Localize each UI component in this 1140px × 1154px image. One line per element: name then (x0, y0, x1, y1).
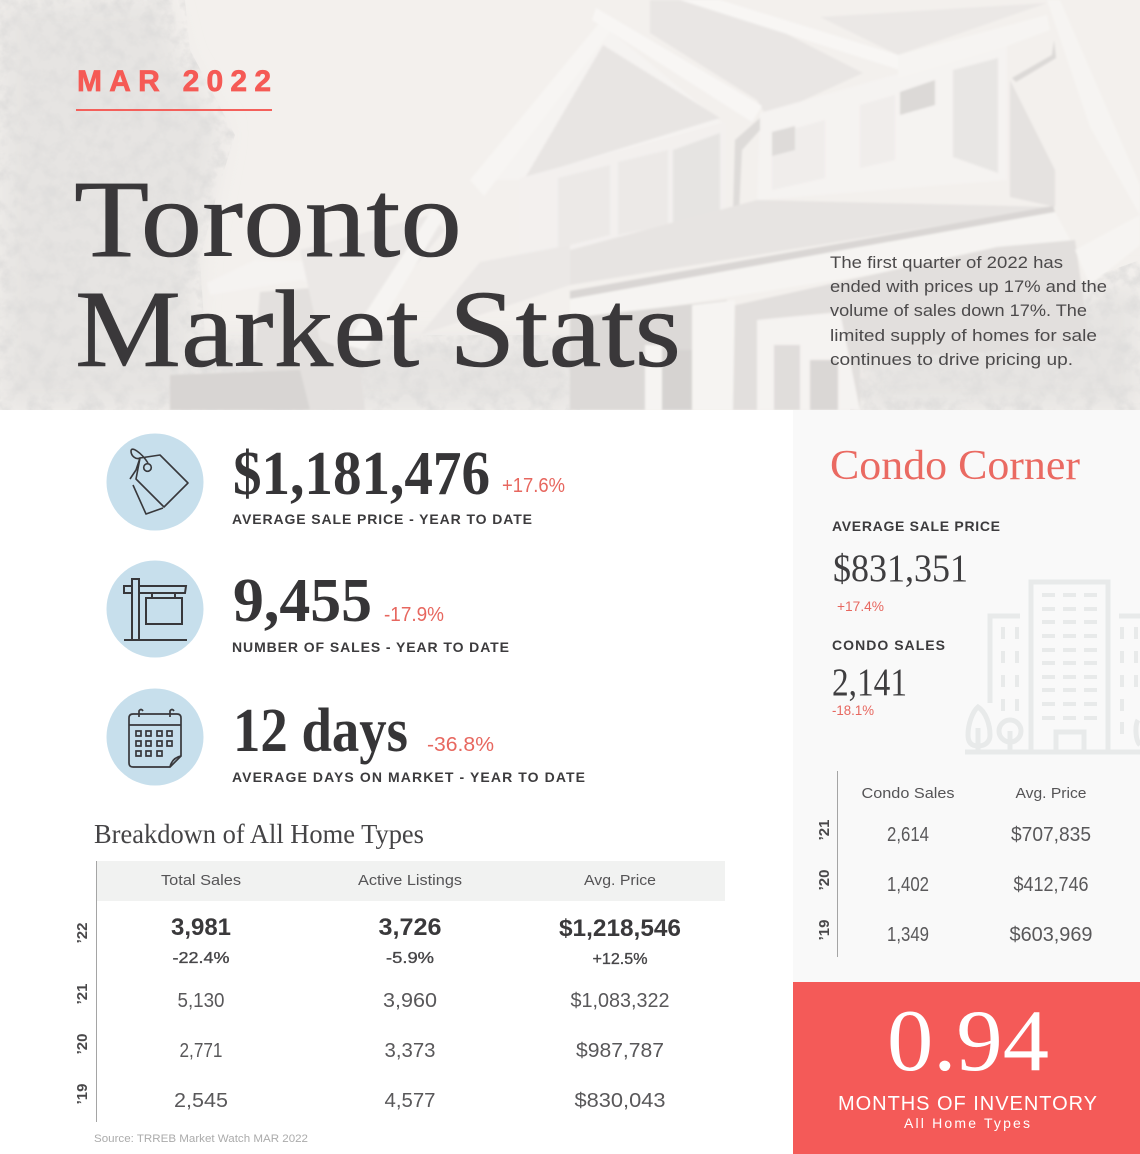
stat: days on market: AVERAGE DAYS ON MARKET - YEAR TO DATE (232, 769, 585, 785)
table: condo history: 1,349 (887, 924, 929, 946)
condo stat: condo sales (832, 637, 945, 718)
title: Market Stats (75, 268, 681, 390)
panel: months of inventory: All Home Types (904, 1115, 1030, 1131)
condo stat: average sale price: AVERAGE SALE PRICE (832, 518, 1000, 534)
table: all home types: 3,726 (378, 914, 442, 941)
stat: days on market: 12 days (233, 697, 408, 765)
icon: calendar (106, 688, 204, 786)
intro text: volume of sales down 17%. The (830, 301, 1087, 320)
source note: Source: TRREB Market Watch MAR 2022 (94, 1133, 308, 1145)
intro text: continues to drive pricing up. (830, 350, 1073, 369)
table: condo history (816, 771, 1092, 957)
table: all home types: 4,577 (384, 1090, 436, 1112)
intro text (830, 253, 1107, 369)
table: all home types (74, 861, 725, 1122)
stat: days on market (232, 697, 585, 785)
table: all home types: $830,043 (574, 1090, 666, 1112)
icon: for sale sign (106, 560, 204, 658)
condo stat: condo sales: CONDO SALES (832, 637, 945, 653)
table: all home types: ’19 (74, 1084, 91, 1104)
table: all home types: -22.4% (172, 950, 230, 967)
stat: number of sales (232, 567, 509, 655)
table: all home types: 3,373 (384, 1040, 436, 1062)
table: all home types: -5.9% (386, 950, 434, 967)
heading: breakdown: Breakdown of All Home Types (94, 819, 424, 849)
table: all home types: 3,960 (383, 990, 437, 1012)
table: all home types: $987,787 (576, 1040, 664, 1062)
table: all home types: 5,130 (178, 990, 224, 1012)
panel: months of inventory (793, 982, 1140, 1154)
condo stat: average sale price (832, 518, 1000, 614)
table: all home types: ’22 (74, 923, 91, 943)
table: all home types: ’20 (74, 1034, 91, 1054)
panel: condo background (793, 410, 1140, 982)
panel: months of inventory: MONTHS OF INVENTORY (838, 1093, 1097, 1115)
table: all home types: Active Listings (358, 872, 462, 889)
table: condo history: Condo Sales (862, 785, 954, 802)
stat: number of sales: NUMBER OF SALES - YEAR TO DATE (232, 639, 509, 655)
icon: price tags (106, 434, 204, 530)
table: all home types: 2,771 (180, 1040, 222, 1062)
table: all home types: $1,083,322 (570, 990, 670, 1012)
table: all home types: Total Sales (161, 872, 241, 889)
stat: average sale price: $1,181,476 (233, 440, 490, 508)
condo stat: average sale price: $831,351 (833, 547, 968, 590)
stat: average sale price: +17.6% (502, 475, 565, 497)
stat: average sale price: AVERAGE SALE PRICE - YEAR TO DATE (232, 511, 532, 527)
date label: MAR 2022 (77, 65, 271, 98)
table: condo history: ’21 (816, 820, 833, 840)
condo stat: average sale price: +17.4% (837, 598, 884, 614)
intro text: limited supply of homes for sale (830, 326, 1097, 345)
table: all home types: Avg. Price (584, 872, 656, 889)
table: condo history: 1,402 (887, 874, 929, 896)
table: condo history: $412,746 (1014, 874, 1088, 896)
table: condo history: ’20 (816, 870, 833, 890)
table: condo history: 2,614 (887, 824, 929, 846)
table: condo history: $603,969 (1010, 924, 1092, 946)
stat: number of sales: 9,455 (233, 567, 372, 635)
table: all home types: ’21 (74, 984, 91, 1004)
table: all home types: 2,545 (174, 1090, 228, 1112)
heading: condo corner: Condo Corner (830, 443, 1080, 489)
stat: number of sales: -17.9% (384, 604, 444, 626)
panel: months of inventory: 0.94 (887, 993, 1049, 1090)
table: condo history: Avg. Price (1016, 785, 1086, 802)
table: all home types: $1,218,546 (559, 915, 681, 942)
icon: condo buildings (965, 582, 1140, 752)
title (74, 158, 681, 390)
table: all home types: +12.5% (592, 951, 648, 968)
table: condo history: $707,835 (1011, 824, 1091, 846)
intro text: The first quarter of 2022 has (830, 253, 1063, 272)
title: Toronto (74, 158, 462, 280)
table: condo history: ’19 (816, 920, 833, 940)
table: all home types: 3,981 (171, 914, 231, 941)
condo stat: condo sales: -18.1% (832, 702, 874, 718)
stat: average sale price (232, 440, 565, 527)
header photo: house and tree (0, 0, 1140, 410)
condo stat: condo sales: 2,141 (832, 661, 907, 704)
intro text: ended with prices up 17% and the (830, 277, 1107, 296)
stat: days on market: -36.8% (427, 734, 494, 756)
